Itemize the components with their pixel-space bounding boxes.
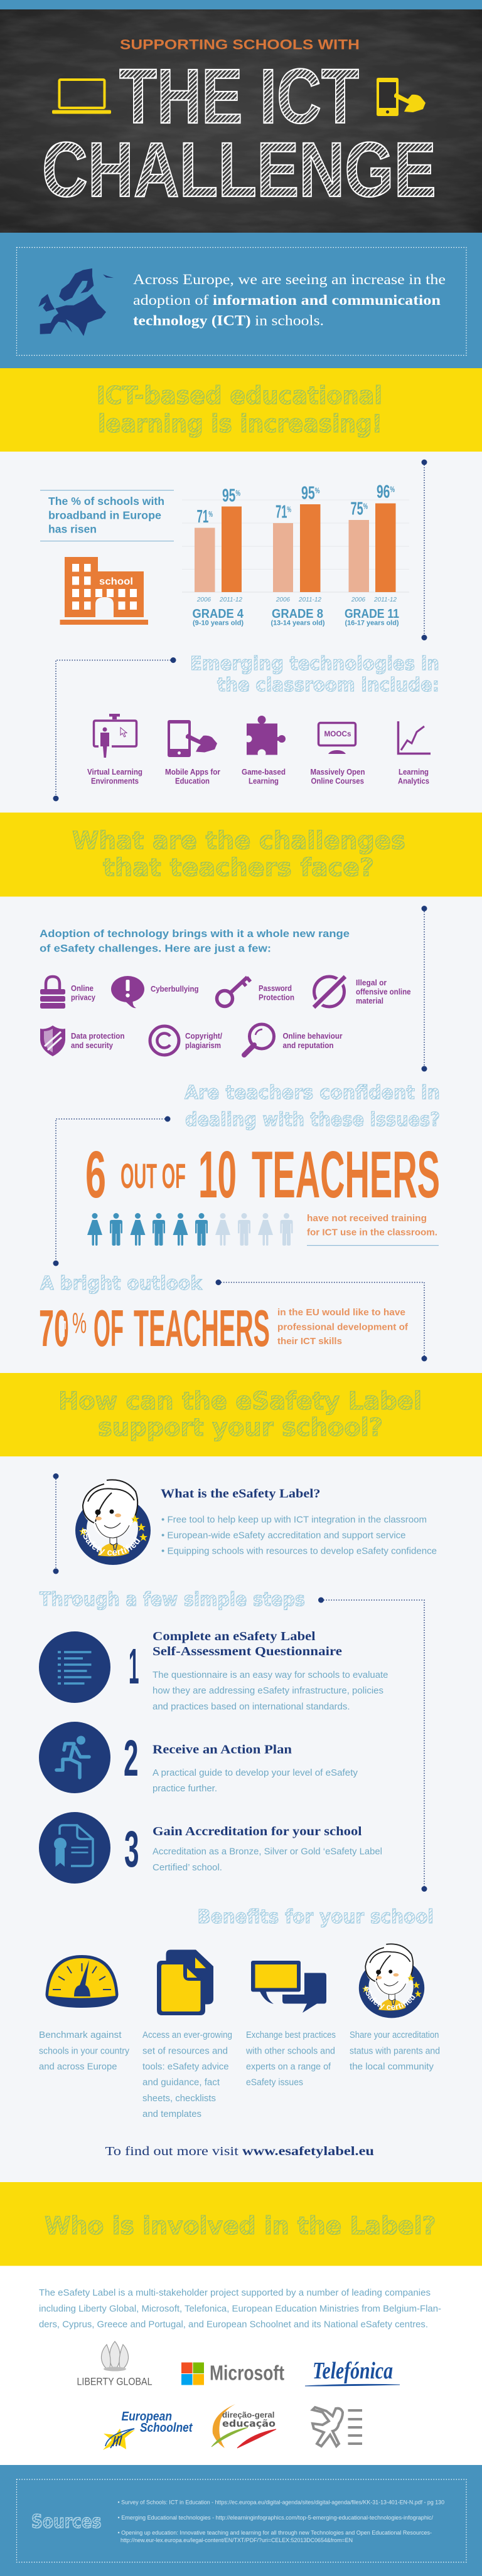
benefit: resources: and templates — [142, 2109, 201, 2119]
icon: accreditation certificate — [39, 1812, 110, 1884]
text block: what is the label: • European-wide eSafety accreditation and support service — [161, 1530, 405, 1540]
bar chart: broadband by grade — [182, 482, 409, 627]
benefit: resources: sheets, checklists — [142, 2093, 216, 2104]
icon: copyright — [150, 1026, 179, 1055]
benefit: share — [350, 1943, 440, 2072]
section heading: how can the label support: How can the eSafety Label — [58, 1387, 422, 1416]
panel: broadband text: has risen — [48, 523, 97, 536]
esafety challenges grid: Online — [71, 984, 94, 993]
step 3: 3 — [124, 1821, 139, 1878]
panel: broadband text: The % of schools with — [48, 495, 164, 507]
esafety challenges grid: Copyright/ — [185, 1032, 222, 1041]
icon: speech bubbles — [251, 1961, 326, 2013]
text block: adoption intro: Adoption of technology brings with it a whole new range — [40, 928, 350, 940]
partners text: The eSafety Label is a multi-stakeholder project supported by a number of leading companies — [39, 2287, 431, 2298]
source list — [118, 2499, 444, 2543]
heading: a bright outlook: A bright outlook — [40, 1273, 203, 1295]
step 3: Gain Accreditation for your school — [153, 1825, 362, 1838]
benefit: benchmark: Benchmark against — [39, 2030, 122, 2040]
benefit: share: the local community — [350, 2061, 434, 2072]
statistic: 70% of teachers: their ICT skills — [277, 1336, 342, 1347]
benefit: share: Share your accreditation — [350, 2030, 439, 2040]
connector: right dotted elbow — [216, 1280, 427, 1361]
icon labels: Game-based — [242, 768, 286, 777]
esafety challenges grid: material — [356, 997, 383, 1005]
esafety challenges grid: and reputation — [282, 1041, 334, 1050]
benefit: exchange: with other schools and — [245, 2046, 335, 2056]
logo: Telefonica: Telefónica — [313, 2358, 393, 2384]
step 1: how they are addressing eSafety infrastructure, policies — [153, 1685, 383, 1696]
header: chalkboard title — [0, 0, 482, 233]
heading: emerging technologies: the classroom include: — [217, 674, 439, 696]
text block: what is the label: What is the eSafety Label? — [161, 1487, 320, 1500]
icon labels: Learning — [249, 777, 279, 785]
text block: what is the label: • Free tool to help keep up with ICT integration in the classroom — [161, 1514, 427, 1525]
icon labels: Online Courses — [311, 777, 364, 785]
logo: direcao-geral da educacao: direção-geral — [222, 2410, 275, 2420]
step 1: Complete an eSafety Label — [153, 1630, 316, 1643]
section heading: ICT-based learning — [0, 368, 482, 452]
logo: European Schoolnet — [103, 2410, 193, 2450]
icon: learning analytics — [398, 721, 431, 754]
benefit: exchange: experts on a range of — [246, 2061, 331, 2072]
text block: training note — [307, 1213, 439, 1246]
icon: laptop — [52, 80, 111, 114]
icon: magnifier — [244, 1024, 274, 1055]
logo: Liberty Global — [77, 2341, 152, 2387]
logo: Microsoft — [181, 2361, 284, 2385]
statistic: 6 out of 10 teachers — [85, 1138, 440, 1212]
benefit: exchange — [245, 1961, 336, 2087]
panel: sources — [0, 2465, 482, 2576]
icon labels: Massively Open — [310, 768, 365, 777]
bar chart: broadband by grade: 96 — [377, 482, 397, 502]
statistic: 6 out of 10 teachers: OUT OF — [120, 1156, 186, 1195]
heading: through a few simple steps: Through a few simple steps — [40, 1589, 305, 1611]
esafety challenges grid — [40, 976, 411, 1056]
heading: are teachers confident: Are teachers confident in — [185, 1082, 440, 1104]
icon: puzzle piece — [245, 716, 286, 758]
bar chart: broadband by grade: GRADE 4 — [192, 607, 244, 621]
statistic: 70% of teachers: 70 — [39, 1299, 69, 1357]
statistic: 70% of teachers: in the EU would like to have — [277, 1307, 405, 1318]
text block: adoption intro — [40, 928, 350, 955]
icon: gauge — [45, 1955, 118, 2008]
partners text — [39, 2287, 441, 2330]
icon: eSafety certified badge: eSafety certified — [364, 1987, 415, 2010]
logo: direcao-geral da educacao — [212, 2404, 276, 2448]
icon: running figure — [39, 1722, 110, 1793]
icon: Europe map — [38, 268, 114, 336]
esafety challenges grid: privacy — [71, 994, 95, 1002]
icon labels: Education — [175, 777, 210, 785]
title line one: THE ICT — [119, 54, 359, 140]
esafety challenges grid: Cyberbullying — [151, 985, 198, 994]
heading: are teachers confident — [185, 1082, 440, 1131]
connector: left dotted elbow — [53, 1116, 171, 1266]
benefit: benchmark: schools in your country — [39, 2046, 129, 2056]
logo: Microsoft: Microsoft — [210, 2361, 284, 2385]
intro text: technology (ICT) in schools. — [133, 312, 324, 329]
logo: direcao-geral da educacao: educação — [222, 2418, 276, 2429]
step 1: and practices based on international standards. — [153, 1701, 350, 1712]
connector: right dotted elbow — [318, 1597, 427, 1892]
bar chart: broadband by grade: 75 — [350, 499, 371, 519]
heading: emerging technologies — [190, 653, 439, 696]
call to action: website: To find out more visit www.esafetylabel.eu — [105, 2144, 374, 2158]
statistic: 70% of teachers: OF — [94, 1299, 124, 1357]
icon: school building: school — [99, 576, 133, 587]
icon: shield — [40, 1026, 65, 1056]
panel: partners — [0, 2266, 482, 2465]
text block: adoption intro: of eSafety challenges. Here are just a few: — [40, 943, 271, 955]
bar chart: broadband by grade: 2011-12 — [373, 596, 397, 603]
esafety challenges grid: Illegal or — [356, 978, 387, 987]
section heading: who is involved: Who is involved in the Label? — [45, 2212, 436, 2240]
step 1: Self-Assessment Questionnaire — [153, 1645, 342, 1658]
bar chart: broadband by grade: 71 — [197, 507, 217, 527]
step 1 — [39, 1630, 388, 1712]
icon labels: Analytics — [398, 777, 429, 785]
statistic: 70% of teachers: TEACHERS — [134, 1299, 270, 1357]
logo: Flanders lion — [313, 2407, 362, 2446]
esafety challenges grid: Password — [259, 984, 292, 993]
step 3: Certified’ school. — [153, 1862, 222, 1873]
icon: prohibited sign — [314, 977, 345, 1007]
benefit: resources — [142, 1949, 232, 2119]
step 2 — [39, 1722, 358, 1794]
icon: lock — [40, 977, 65, 1009]
bar chart: broadband by grade: 2006 — [351, 596, 366, 603]
bar chart: broadband by grade: 95 — [301, 483, 321, 503]
bar chart: broadband by grade: 2006 — [276, 596, 291, 603]
emerging technology icons — [87, 714, 431, 785]
bar chart: broadband by grade: 71 — [276, 502, 296, 522]
bar chart: broadband by grade: GRADE 8 — [272, 607, 323, 621]
intro text: adoption of information and communication — [133, 292, 441, 308]
connector: left dotted elbow — [53, 657, 176, 802]
icon labels: Mobile Apps for — [165, 768, 220, 777]
esafety challenges grid: plagiarism — [185, 1041, 221, 1050]
section heading: how can the label support: support your school? — [98, 1414, 383, 1442]
bar chart: broadband by grade: 95 — [222, 485, 242, 506]
text block: training note: have not received training — [307, 1213, 427, 1224]
icon: mobile apps — [168, 720, 217, 757]
benefit: benchmark — [39, 1955, 129, 2072]
logo: Liberty Global: LIBERTY GLOBAL — [77, 2376, 152, 2387]
section heading: challenges: that teachers face? — [103, 854, 374, 882]
bar chart: broadband by grade: % — [363, 502, 368, 511]
esafety challenges grid: Protection — [259, 994, 294, 1002]
heading: are teachers confident: dealing with these issues? — [185, 1109, 440, 1131]
bar chart: broadband by grade: % — [315, 485, 320, 496]
text block: what is the label — [161, 1487, 437, 1557]
statistic: 6 out of 10 teachers: 10 — [198, 1138, 237, 1212]
section heading: how can the label support — [0, 1373, 482, 1456]
section heading: ICT-based learning: ICT-based educational — [97, 382, 382, 410]
section heading: challenges: What are the challenges — [72, 827, 405, 856]
section heading: who is involved — [0, 2182, 482, 2266]
icon: speech bubble warning — [111, 976, 144, 1008]
icon: MOOCs screen: MOOCs — [324, 731, 351, 738]
benefit: resources: and guidance, fact — [142, 2077, 220, 2087]
source list: • Opening up education: Innovative teaching and learning for all through new Technologies and Open Educational Resources- — [118, 2530, 432, 2536]
bar chart: broadband by grade: % — [235, 488, 240, 498]
icon labels: Environments — [91, 777, 139, 785]
panel: broadband text: broadband in Europe — [48, 509, 161, 522]
heading: emerging technologies: Emerging technologies in — [190, 653, 439, 675]
step 2: A practical guide to develop your level of eSafety — [153, 1768, 358, 1778]
text block: training note: for ICT use in the classroom. — [307, 1227, 437, 1238]
bar chart: broadband by grade: (16-17 years old) — [345, 620, 399, 627]
benefit: resources: set of resources and — [142, 2046, 228, 2056]
esafety challenges grid: and security — [71, 1041, 113, 1050]
bar chart: broadband by grade: GRADE 11 — [345, 607, 399, 621]
intro text: Across Europe, we are seeing an increase in the — [133, 272, 446, 287]
statistic: 6 out of 10 teachers: 6 — [85, 1138, 106, 1212]
section heading: challenges — [0, 813, 482, 897]
source list: • Emerging Educational technologies - http://elearninginfographics.com/top-5-emerging-educational-technologies-infographic/ — [118, 2515, 433, 2521]
heading: benefits: Benefits for your school — [197, 1906, 434, 1928]
icon: phone with hand — [377, 78, 426, 116]
icon: virtual learning environment — [94, 714, 137, 758]
icon labels: Learning — [399, 768, 429, 777]
esafety challenges grid: offensive online — [356, 987, 411, 996]
source list: • Survey of Schools: ICT in Education - https://ec.europa.eu/digital-agenda/sites/digital-agenda/files/KK-31-13-401-EN-N.pdf - pg 130 — [118, 2499, 444, 2505]
panel: broadband text — [40, 490, 174, 541]
logo: European Schoolnet: European — [122, 2410, 172, 2424]
logo: European Schoolnet: Schoolnet — [140, 2421, 193, 2435]
bar chart: broadband by grade: (9-10 years old) — [193, 620, 244, 627]
partners text: including Liberty Global, Microsoft, Telefonica, European Education Ministries from Belgium-Flan- — [39, 2303, 441, 2314]
benefit: benchmark: and across Europe — [39, 2061, 117, 2072]
benefit: resources: tools: eSafety advice — [142, 2061, 228, 2072]
step 2: practice further. — [153, 1783, 217, 1794]
section heading: ICT-based learning: learning is increasing! — [98, 410, 382, 438]
icon: school building — [60, 557, 148, 625]
heading: sources: Sources — [31, 2511, 102, 2532]
icon labels — [87, 768, 429, 785]
bar chart: broadband by grade: % — [390, 484, 395, 494]
statistic: 70% of teachers: % — [72, 1307, 87, 1339]
bar chart: broadband by grade: 2011-12 — [219, 596, 242, 603]
bar chart: broadband by grade: % — [208, 509, 213, 519]
step 2: Receive an Action Plan — [153, 1742, 292, 1756]
step 3 — [39, 1812, 382, 1884]
icon: questionnaire list — [39, 1631, 110, 1703]
step 2: 2 — [124, 1730, 138, 1787]
step 1: The questionnaire is an easy way for schools to evaluate — [153, 1670, 388, 1680]
icon: eSafety certified badge: eSafety certified — [82, 1529, 141, 1556]
connector: right dotted line — [422, 906, 427, 1071]
statistic: 70% of teachers: professional development of — [277, 1322, 409, 1332]
text block: what is the label: • Equipping schools with resources to develop eSafety confidence — [161, 1545, 437, 1557]
icon: key — [217, 977, 250, 1006]
benefit: exchange: Exchange best practices — [246, 2030, 336, 2040]
bar chart: broadband by grade: (13-14 years old) — [271, 620, 325, 627]
connector: right dotted line — [422, 459, 427, 640]
source list: http://new.eur-lex.europa.eu/legal-content/EN/TXT/PDF/?uri=CELEX:52013DC0654&from=EN — [120, 2537, 353, 2543]
bar chart: broadband by grade: 2006 — [196, 596, 212, 603]
icon: documents — [157, 1949, 213, 2015]
icon: eSafety certified badge — [75, 1479, 151, 1565]
benefit: resources: Access an ever-growing — [142, 2030, 232, 2040]
esafety challenges grid: Online behaviour — [282, 1032, 343, 1041]
step 3: Accreditation as a Bronze, Silver or Gold ‘eSafety Label — [153, 1847, 382, 1857]
connector: left dotted line — [53, 1473, 59, 1574]
icon: MOOCs screen — [319, 723, 355, 754]
bar chart: broadband by grade: 2011-12 — [298, 596, 321, 603]
benefit: exchange: eSafety issues — [246, 2077, 303, 2087]
icon: eSafety certified badge — [359, 1943, 424, 2018]
icon labels: Virtual Learning — [87, 768, 142, 777]
partners text: ders, Cyprus, Greece and Portugal, and European Schoolnet and its National eSafety centres. — [39, 2319, 428, 2330]
esafety challenges grid: Data protection — [71, 1032, 124, 1041]
subtitle: SUPPORTING SCHOOLS WITH — [120, 36, 360, 53]
benefit: share: status with parents and — [350, 2046, 440, 2056]
bar chart: broadband by grade: % — [287, 504, 291, 514]
pictogram: ten teachers — [87, 1213, 292, 1246]
intro text — [133, 272, 446, 329]
step 1: 1 — [129, 1638, 139, 1694]
panel: intro — [0, 233, 482, 368]
